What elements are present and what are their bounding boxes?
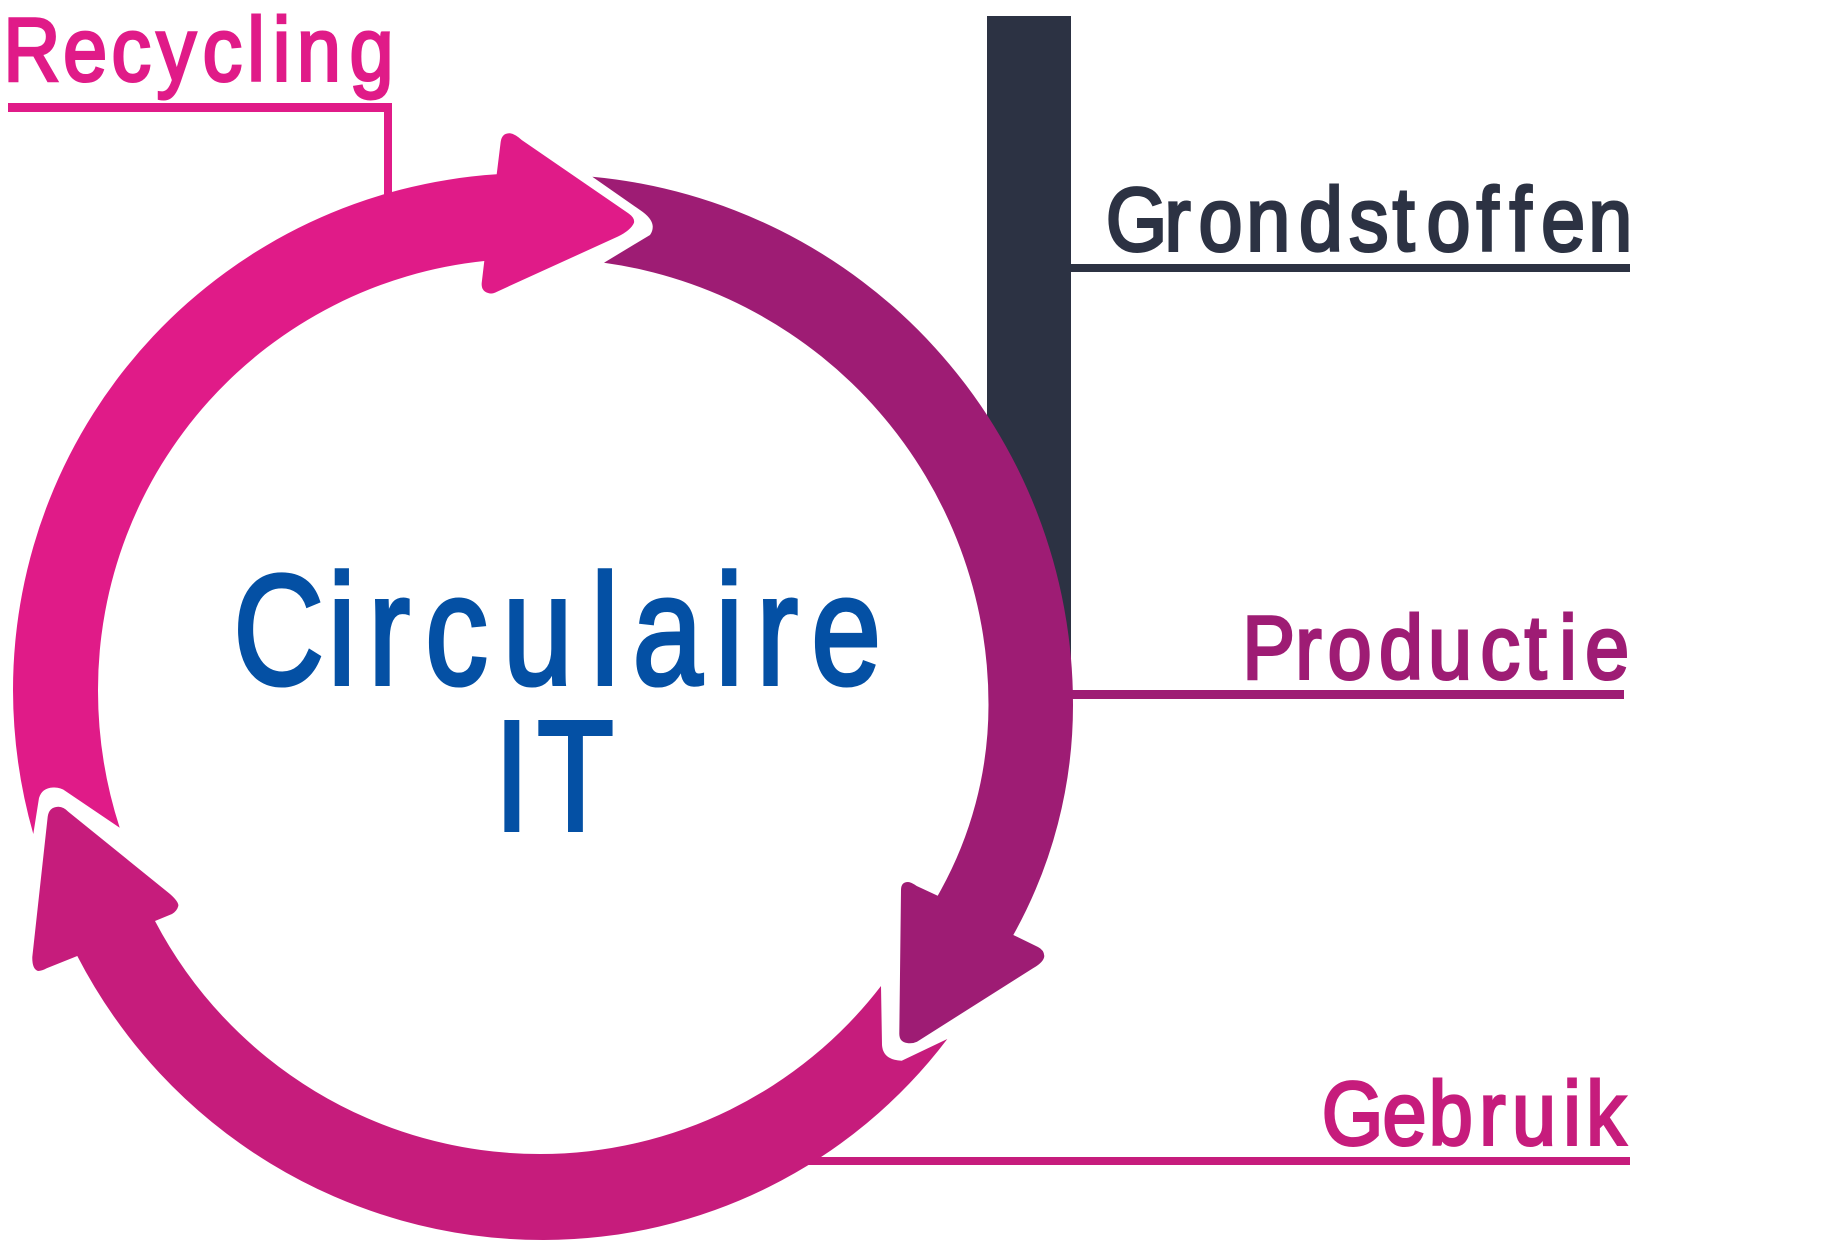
label: Grondstoffen: Grondstoffen [1106, 169, 1632, 270]
grondstoffen leader line [1071, 264, 1630, 272]
label: Gebruik: Gebruik [1322, 1063, 1626, 1164]
title: Circulaire IT [233, 543, 881, 864]
title line: IT: IT [494, 689, 614, 864]
productie leader line [1060, 690, 1624, 699]
gebruik leader line [800, 1157, 1630, 1165]
arrow: recycling [13, 133, 634, 834]
title line: Circulaire: Circulaire [233, 543, 881, 718]
label: Productie: Productie [1242, 597, 1629, 698]
recycling leader line [8, 103, 392, 200]
grondstoffen vertical bar [987, 16, 1071, 660]
arrow: gebruik [32, 807, 947, 1240]
arrow: productie [592, 177, 1073, 1043]
label: Recycling: Recycling [3, 0, 394, 100]
